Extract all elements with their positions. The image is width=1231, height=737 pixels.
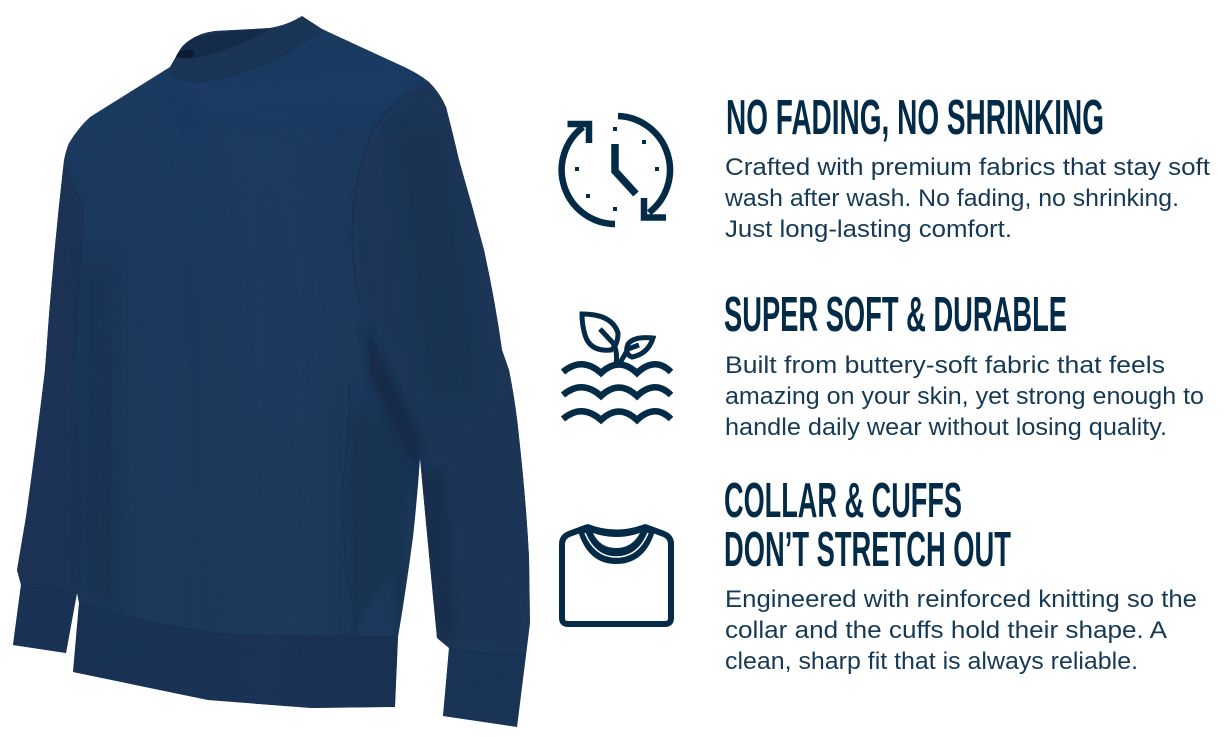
heading	[724, 474, 1011, 577]
description	[725, 352, 1204, 441]
collar ribbing	[170, 16, 322, 81]
description: handle daily wear without losing quality.	[725, 414, 1167, 441]
left cuff	[13, 585, 77, 653]
panel: no fading, no shrinking	[562, 91, 1210, 243]
heading: DON’T STRETCH OUT	[724, 523, 1011, 577]
bottom hem	[73, 603, 398, 708]
description: wash after wash. No fading, no shrinking.	[724, 185, 1179, 212]
left sleeve	[13, 162, 79, 653]
description	[725, 586, 1197, 675]
icon: folded shirt	[562, 524, 671, 624]
description: Engineered with reinforced knitting so the	[725, 586, 1197, 613]
sweatshirt	[0, 0, 540, 737]
right cuff	[443, 648, 526, 727]
heading: COLLAR & CUFFS	[724, 474, 962, 528]
description: collar and the cuffs hold their shape. A	[725, 617, 1167, 644]
panel: super soft and durable	[563, 288, 1204, 441]
right sleeve	[376, 80, 530, 654]
fabric shading	[85, 60, 480, 640]
description: Just long-lasting comfort.	[725, 216, 1012, 243]
description: amazing on your skin, yet strong enough to	[725, 383, 1204, 410]
panel: collar and cuffs	[562, 474, 1197, 675]
neck opening	[174, 28, 272, 59]
icon: clock with circular arrows	[562, 116, 670, 224]
icon: sprout over waves	[563, 314, 671, 420]
description: clean, sharp fit that is always reliable.	[725, 648, 1138, 675]
description	[724, 154, 1210, 243]
description: Crafted with premium fabrics that stay soft	[725, 154, 1210, 181]
seams	[21, 30, 526, 655]
description: Built from buttery-soft fabric that feels	[725, 352, 1165, 379]
